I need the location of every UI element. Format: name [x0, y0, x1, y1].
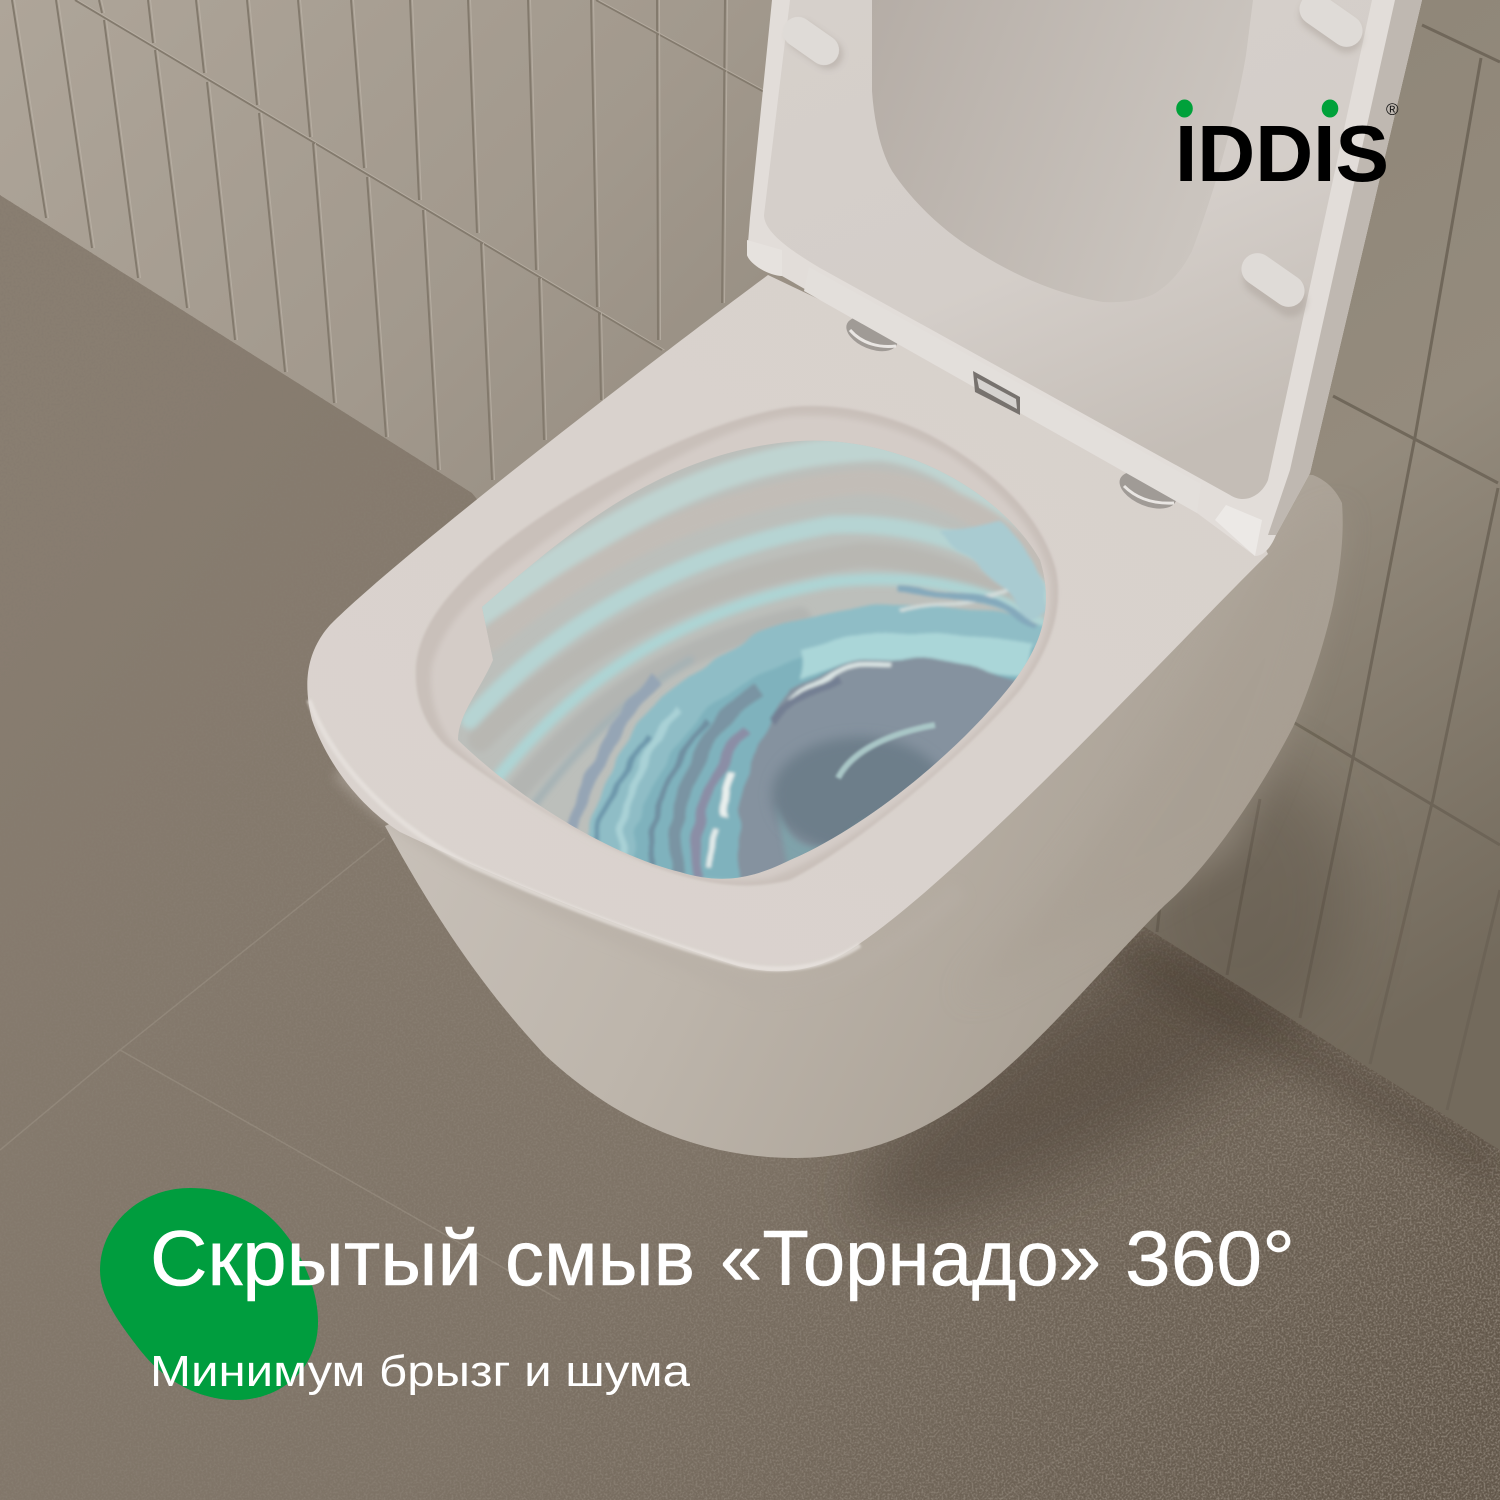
rim front shading	[340, 770, 960, 990]
title: «Торнадо»	[720, 1214, 1101, 1302]
hinges	[841, 310, 1182, 516]
title: Скрытый	[150, 1214, 482, 1302]
drain	[772, 737, 948, 853]
lid bumpers	[777, 0, 1369, 323]
water swirl	[458, 440, 1046, 879]
wall left	[0, 0, 900, 560]
wall right	[1130, 0, 1500, 1150]
green blob	[100, 1188, 318, 1400]
toilet rim	[307, 275, 1268, 971]
wave crest	[739, 659, 1025, 880]
bowl opening	[416, 406, 1058, 885]
raised seat lid	[747, 0, 1422, 556]
toilet	[307, 275, 1343, 1158]
registered mark: ®	[1386, 100, 1399, 119]
hinge bar	[804, 267, 1201, 513]
lid inner ring	[764, 0, 1372, 499]
lid outer edge	[747, 0, 1422, 556]
title: смыв	[505, 1214, 695, 1302]
lid inner recess	[872, 0, 1253, 302]
upper pale bands	[470, 448, 1050, 620]
toilet shadow on floor	[847, 929, 1313, 1245]
title: 360°	[1125, 1214, 1295, 1302]
logo dots	[1176, 100, 1338, 118]
subtitle: Минимум брызг и шума	[150, 1347, 691, 1396]
wave body	[565, 520, 1050, 900]
chrome latch	[973, 371, 1020, 415]
toilet body	[385, 470, 1343, 1158]
logo: IDDIS: IDDIS	[1175, 109, 1389, 198]
